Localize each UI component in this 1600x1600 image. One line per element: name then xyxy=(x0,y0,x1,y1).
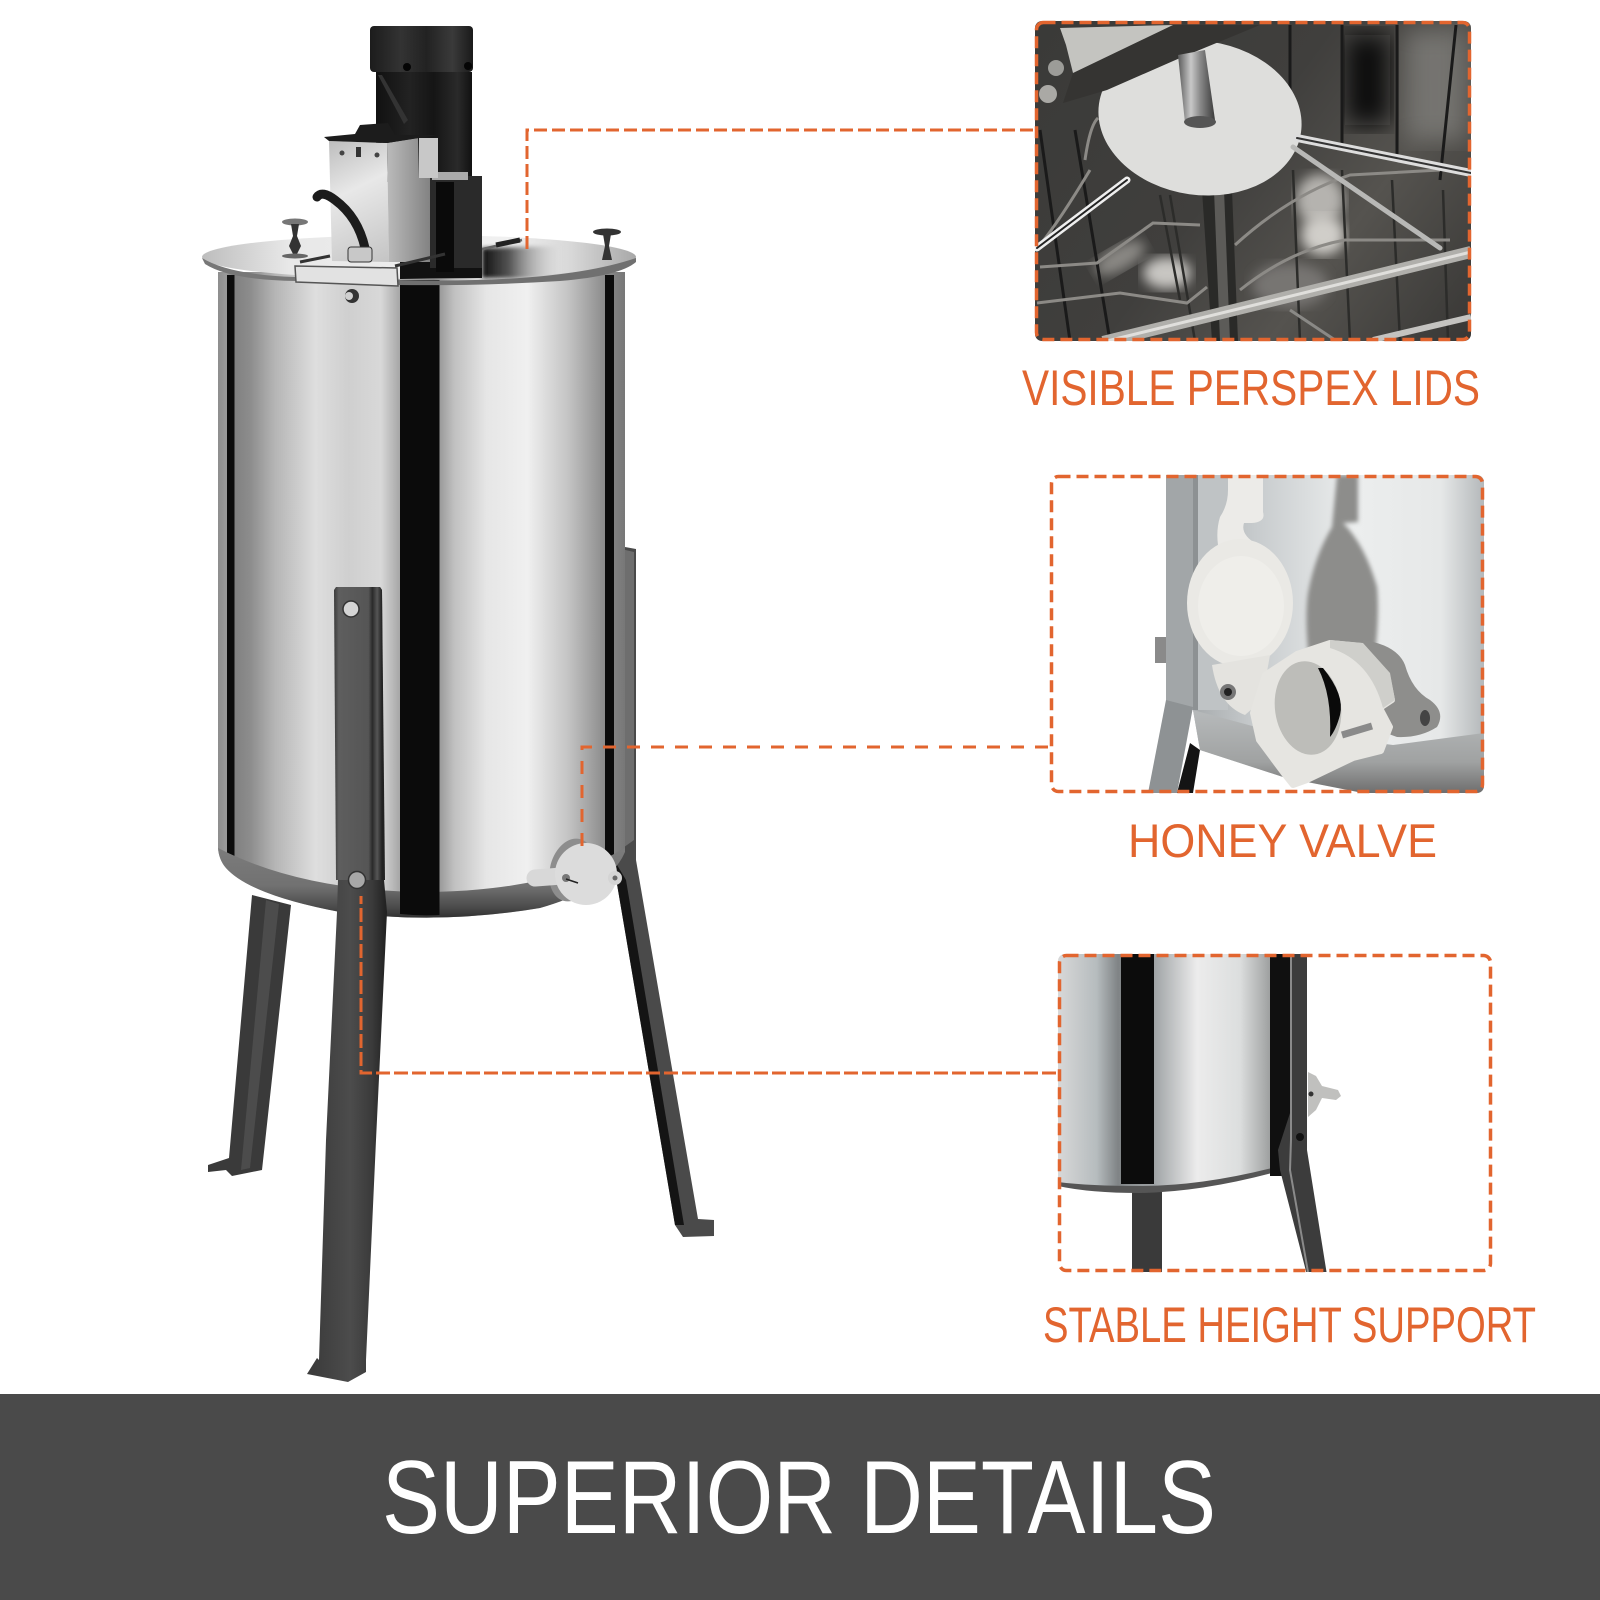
bolt bottom xyxy=(348,872,366,888)
right leg xyxy=(606,545,714,1237)
support leg xyxy=(1278,954,1327,1275)
beam top xyxy=(1060,25,1173,73)
caption: HONEY VALVE xyxy=(1128,814,1437,867)
lid xyxy=(202,235,636,303)
right plate xyxy=(1270,954,1292,1176)
caption: VISIBLE PERSPEX LIDS xyxy=(1022,360,1480,416)
dashed frame xyxy=(1036,22,1470,340)
motor body xyxy=(376,72,472,182)
drum edge strip xyxy=(1166,475,1193,710)
handle screw xyxy=(1342,726,1372,735)
dashed frame xyxy=(1060,956,1490,1270)
dashed frame xyxy=(1052,476,1482,792)
rear leg xyxy=(1132,1190,1162,1275)
bolt top xyxy=(343,601,359,617)
dark upper reflection xyxy=(1345,35,1390,125)
left vertical reflection xyxy=(227,275,234,860)
radial rods xyxy=(1037,138,1471,248)
tank bottom xyxy=(1193,710,1484,793)
control box xyxy=(300,123,445,266)
disc xyxy=(1098,42,1302,196)
support leg xyxy=(1148,700,1193,793)
beam underside xyxy=(1092,25,1259,92)
product photo: honey extractor xyxy=(202,26,714,1382)
valve cap xyxy=(1187,539,1293,667)
metal reflections xyxy=(1296,174,1344,226)
bottom shadow band xyxy=(218,848,625,918)
cap strap xyxy=(1217,475,1264,545)
drum xyxy=(1058,954,1272,1192)
detail photo: lower drum and legs xyxy=(1058,954,1341,1275)
lower shaft xyxy=(1202,190,1238,341)
clamp plate xyxy=(295,266,398,286)
bottom edge xyxy=(1058,1168,1272,1193)
cable gland xyxy=(348,247,372,262)
wire rod xyxy=(435,240,522,260)
wire frames xyxy=(1037,118,1450,303)
honey gate valve xyxy=(535,833,622,907)
power cable xyxy=(317,194,365,248)
gear block xyxy=(430,172,482,272)
upper shaft xyxy=(1178,50,1215,123)
panel: honey valve xyxy=(1052,475,1484,867)
connector: lid to perspex detail xyxy=(527,130,1033,250)
back left leg xyxy=(208,895,291,1176)
motor cap xyxy=(370,26,473,72)
valve bore xyxy=(1274,661,1342,755)
side bolt xyxy=(1155,637,1166,663)
valve flange xyxy=(1372,642,1440,738)
lid knob left xyxy=(282,218,308,258)
bolt xyxy=(1296,1133,1304,1141)
latch bolt xyxy=(345,289,359,303)
title band xyxy=(0,1394,1600,1600)
centre vertical reflection xyxy=(400,280,440,915)
cap hinge xyxy=(1212,655,1270,715)
lid knob right xyxy=(593,228,621,260)
beam bolts xyxy=(1048,60,1064,76)
front basket rails xyxy=(1103,252,1471,350)
leg shadow xyxy=(1177,743,1200,793)
front leg xyxy=(307,587,387,1382)
panel: stable height support xyxy=(1043,954,1536,1353)
valve end-on xyxy=(1308,1072,1341,1117)
panel: visible perspex lids xyxy=(1022,21,1480,416)
motor xyxy=(370,26,473,182)
detail photo: basket interior xyxy=(1035,21,1471,350)
right vertical reflection xyxy=(605,275,614,860)
connector: leg to height support detail xyxy=(361,896,1056,1073)
detail photo: valve close-up xyxy=(1148,475,1484,793)
valve body xyxy=(1253,643,1392,785)
title: SUPERIOR DETAILS xyxy=(382,1440,1216,1556)
stripe xyxy=(1121,954,1154,1184)
connector: valve to honey valve detail xyxy=(582,747,1048,857)
valve shadow on wall xyxy=(1306,475,1378,670)
hinge screw xyxy=(1220,684,1236,700)
tank wall xyxy=(1193,475,1484,793)
vertical mesh wires xyxy=(1040,25,1456,341)
drum body xyxy=(218,272,625,918)
